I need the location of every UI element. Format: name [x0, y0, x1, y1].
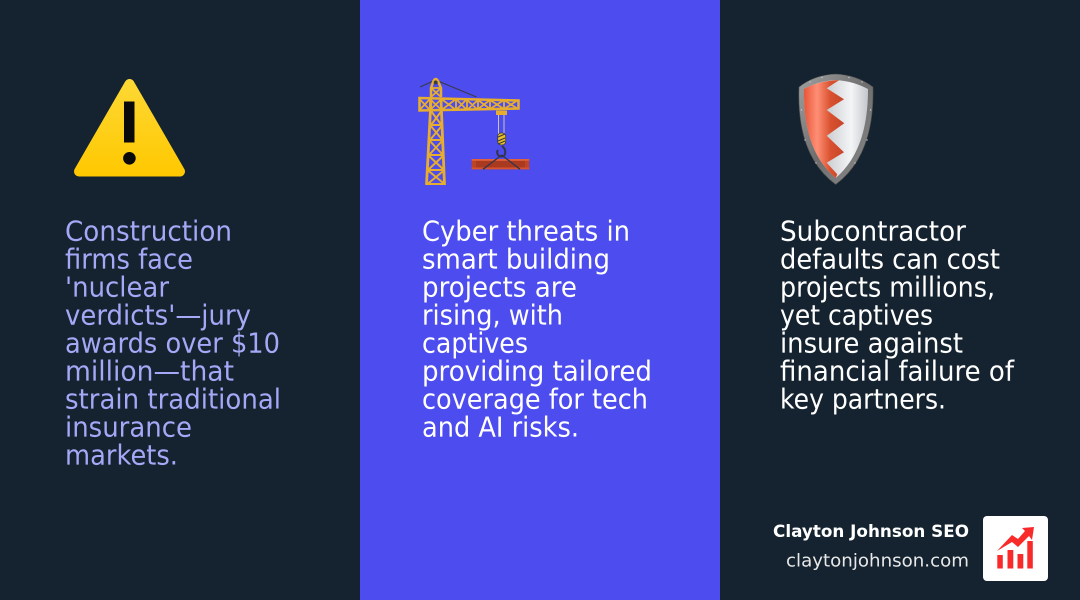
text: cyber threats: Cyber threats in [422, 216, 630, 248]
text: nuclear verdicts: 'nuclear [65, 272, 170, 304]
brand name: Clayton Johnson SEO [773, 522, 969, 541]
text: nuclear verdicts: million—that [65, 356, 234, 388]
icon: warning triangle [79, 84, 180, 172]
panel: cyber threats [360, 0, 720, 600]
icon: logo growth chart [983, 516, 1048, 581]
brand url: claytonjohnson.com [786, 552, 969, 572]
text: cyber threats: projects are [422, 272, 577, 304]
text: nuclear verdicts: markets. [65, 440, 178, 472]
text: cyber threats: providing tailored [422, 356, 652, 388]
text: cyber threats: captives [422, 328, 528, 360]
icon: construction crane [420, 79, 529, 185]
panel: subcontractor defaults [720, 0, 1080, 600]
text: cyber threats: rising, with [422, 300, 563, 332]
text: subcontractor defaults: yet captives [780, 300, 933, 332]
text: subcontractor defaults: projects millions, [780, 272, 995, 304]
text: nuclear verdicts: Construction [65, 216, 232, 248]
brand block [773, 516, 1048, 581]
text: subcontractor defaults [780, 216, 1015, 416]
text: nuclear verdicts: strain traditional [65, 384, 281, 416]
text: cyber threats: and AI risks. [422, 412, 579, 444]
text: nuclear verdicts: firms face [65, 244, 193, 276]
text: cyber threats [422, 216, 652, 444]
text: nuclear verdicts [65, 216, 281, 472]
text: nuclear verdicts: insurance [65, 412, 192, 444]
text: nuclear verdicts: awards over $10 [65, 328, 280, 360]
text: cyber threats: smart building [422, 244, 610, 276]
text: subcontractor defaults: Subcontractor [780, 216, 967, 248]
text: cyber threats: coverage for tech [422, 384, 648, 416]
text: subcontractor defaults: defaults can cost [780, 244, 1000, 276]
icon: shield [799, 74, 873, 184]
text: subcontractor defaults: key partners. [780, 384, 946, 416]
text: subcontractor defaults: insure against [780, 328, 963, 360]
text: nuclear verdicts: verdicts'—jury [65, 300, 251, 332]
text: subcontractor defaults: financial failure of [780, 356, 1015, 388]
panel: nuclear verdicts [0, 0, 360, 600]
